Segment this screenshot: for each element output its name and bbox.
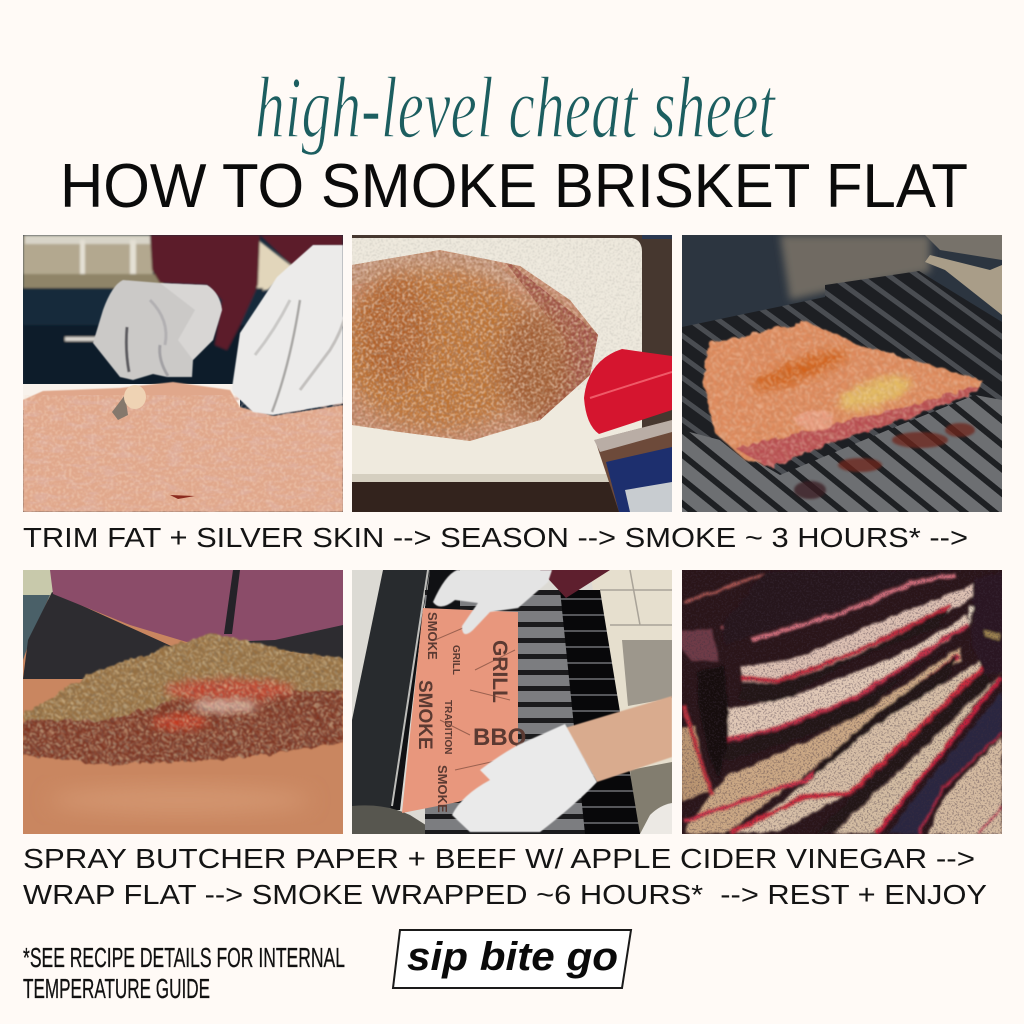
end grain <box>697 665 729 778</box>
drippings <box>794 423 975 499</box>
slice 5 <box>685 647 960 833</box>
brisket <box>23 630 343 770</box>
footnote <box>23 942 345 1004</box>
footnote: *SEE RECIPE DETAILS FOR INTERNAL <box>23 942 345 973</box>
slice 6 <box>729 660 982 833</box>
photo panel: wrapping in butcher paper on grill: GRILL <box>488 640 511 703</box>
tray <box>352 238 642 482</box>
smoked brisket flat <box>702 320 984 470</box>
photo panel: wrapping in butcher paper on grill: BBQ <box>473 724 526 751</box>
slice 7 <box>834 672 1002 833</box>
script subtitle: high-level cheat sheet: high-level cheat sheet <box>255 60 777 157</box>
meat <box>23 382 343 512</box>
top gloved hand <box>433 570 552 634</box>
paving <box>590 570 672 834</box>
slice 4 <box>729 615 969 738</box>
forearm <box>565 696 672 782</box>
butcher paper <box>402 608 518 813</box>
seasoned meat <box>352 250 598 441</box>
top slices <box>684 574 765 602</box>
photo panel: brisket on smoker <box>682 235 1002 512</box>
grill grates <box>682 271 1002 512</box>
logo: sip bite go: sip bite go <box>407 935 618 979</box>
lower gloved hand <box>452 724 597 832</box>
caption: first row steps: TRIM FAT + SILVER SKIN --> SEASON --> SMOKE ~ 3 HOURS* --> <box>23 522 968 553</box>
shirt <box>50 570 343 643</box>
footnote: TEMPERATURE GUIDE <box>23 973 210 1004</box>
photo panel: seasoned brisket on butcher paper <box>23 570 343 834</box>
apron <box>23 592 343 679</box>
right gloved hand <box>232 245 350 415</box>
shaker bottle <box>584 349 672 512</box>
grates <box>425 590 640 834</box>
title: HOW TO SMOKE BRISKET FLAT <box>60 152 968 221</box>
burgundy sleeve <box>540 570 610 598</box>
photo panel: wrapping in butcher paper on grill: SMOKE <box>435 765 450 813</box>
photo panel: wrapping in butcher paper on grill: SMOKE <box>425 612 440 660</box>
left gloved hand <box>93 280 222 380</box>
slice 8 <box>927 737 1002 835</box>
photo panel: wrapping in butcher paper on grill <box>352 570 672 834</box>
photo panel: wrapping in butcher paper on grill: SMOKE <box>414 680 435 750</box>
photo panel: trimming fat and silver skin <box>23 235 343 512</box>
slice 3 <box>742 583 978 683</box>
photo panel: wrapping in butcher paper on grill: GRILL <box>450 645 461 675</box>
caption: second row steps line 2: WRAP FLAT --> SMOKE WRAPPED ~6 HOURS* --> REST + ENJOY <box>23 879 987 910</box>
smoker back wall <box>780 235 930 300</box>
grill frame <box>352 570 430 808</box>
caption: second row steps line 1: SPRAY BUTCHER PAPER + BEEF W/ APPLE CIDER VINEGAR --> <box>23 843 975 874</box>
photo panel: sliced smoked brisket <box>682 570 1002 834</box>
logo: sip bite go <box>393 930 631 988</box>
photo panel: wrapping in butcher paper on grill: TRADITION <box>442 700 453 754</box>
photo panel: seasoning brisket on tray <box>352 235 672 512</box>
